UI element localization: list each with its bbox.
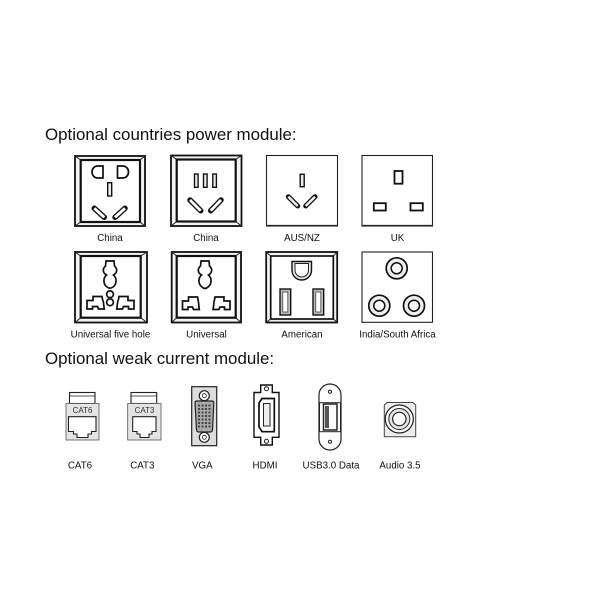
label: CAT3: CAT3 xyxy=(130,460,154,472)
label: CAT6: CAT6 xyxy=(68,460,92,472)
label: China: China xyxy=(193,233,219,244)
icon: CAT3: CAT3 xyxy=(135,406,155,415)
socket: Universal five hole xyxy=(75,252,147,322)
heading: power module: Optional countries power module: xyxy=(45,125,297,144)
socket: AUS/NZ xyxy=(266,156,338,226)
label: Universal: Universal xyxy=(186,330,227,340)
label: HDMI: HDMI xyxy=(253,460,277,472)
icon: Audio 3.5 xyxy=(384,402,416,437)
label: Audio 3.5: Audio 3.5 xyxy=(379,460,421,472)
icon: USB3.0 Data xyxy=(319,384,341,450)
socket: India/South Africa xyxy=(362,252,432,322)
icon: CAT3 xyxy=(128,392,161,440)
socket: China three slot xyxy=(171,156,242,226)
socket: China five pin xyxy=(75,156,145,226)
label: China: China xyxy=(97,233,123,244)
icon: CAT6: CAT6 xyxy=(73,406,93,415)
socket: American xyxy=(266,252,337,322)
icon: HDMI xyxy=(254,385,279,445)
label: UK: UK xyxy=(391,233,405,244)
socket: UK xyxy=(362,156,432,226)
socket: Universal xyxy=(172,252,241,322)
label: Universal five hole: Universal five hole xyxy=(71,330,150,340)
heading: weak current module: Optional weak current module: xyxy=(45,349,274,368)
label: AUS/NZ: AUS/NZ xyxy=(284,233,320,244)
label: VGA: VGA xyxy=(192,460,213,472)
icon: VGA xyxy=(192,387,217,446)
label: USB3.0 Data: USB3.0 Data xyxy=(303,460,360,472)
label: India/South Africa: India/South Africa xyxy=(359,330,436,340)
label: American: American xyxy=(281,330,323,340)
icon: CAT6 xyxy=(66,392,99,440)
